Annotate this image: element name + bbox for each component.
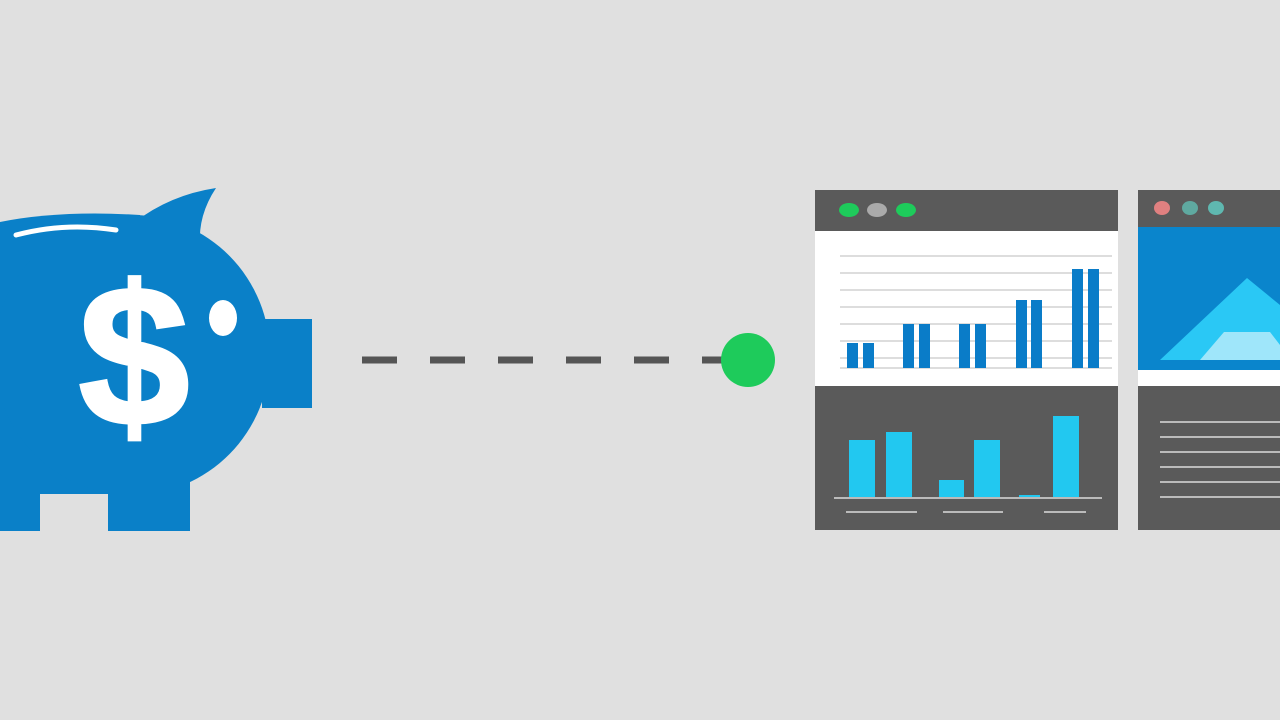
bar chart: cyan <box>849 416 1079 497</box>
panel: image window <box>1138 190 1280 530</box>
arrow: dashed connector <box>362 333 775 387</box>
bar chart: blue pairs <box>847 269 1099 368</box>
icon: eye <box>209 300 237 336</box>
dollar sign: $ <box>78 245 190 468</box>
icon: piggy bank <box>0 188 312 531</box>
icon: mountain <box>1160 278 1280 360</box>
panel: dashboard window <box>815 190 1118 530</box>
